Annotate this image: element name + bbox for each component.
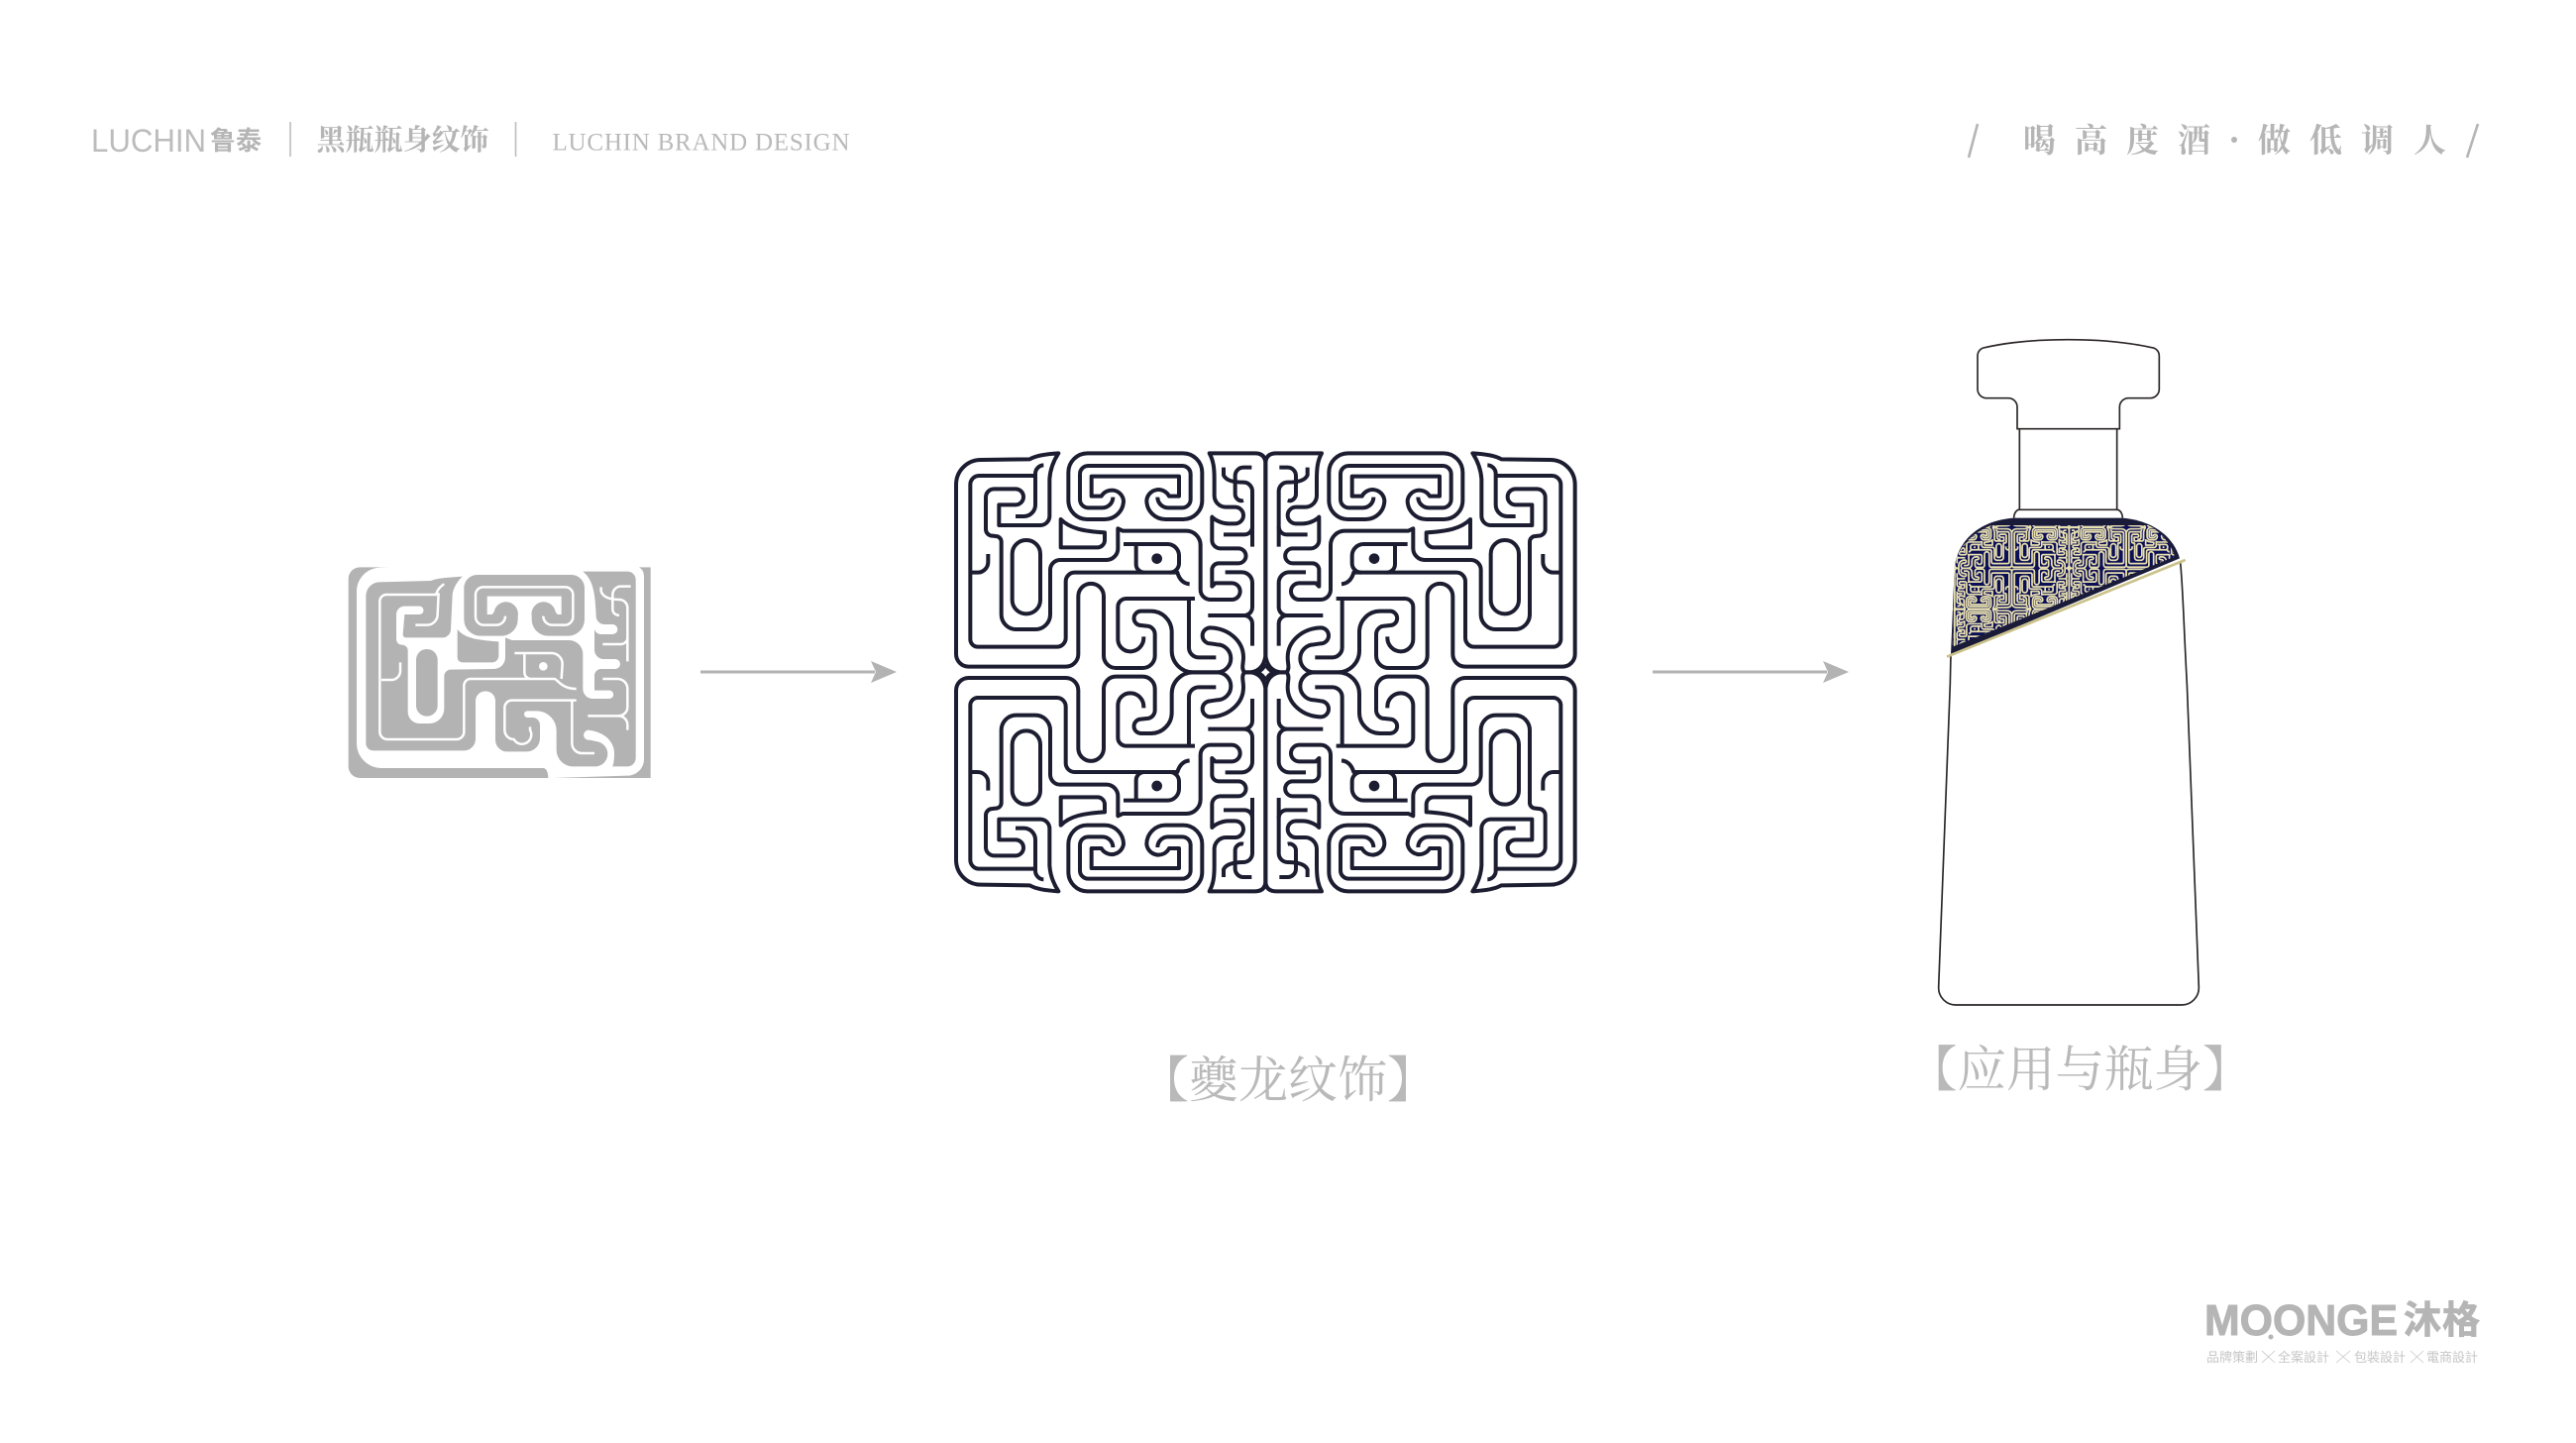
label: kui dragon pattern: 【夔龙纹饰】: [1139, 1053, 1437, 1108]
header: brand and section title: [91, 122, 850, 159]
footer services line: 品牌策劃: [2206, 1350, 2258, 1365]
slogan: top right: [1969, 123, 2478, 160]
label: application on bottle: 【应用与瓶身】: [1908, 1043, 2251, 1097]
kui dragon pattern: [956, 453, 1575, 891]
arrow: pattern to bottle: [1653, 661, 1849, 683]
footer services line: 全案設計: [2278, 1350, 2329, 1365]
footer services line: 包裝設計: [2354, 1350, 2406, 1365]
gray source motif: [349, 567, 651, 778]
bottle with patterned shoulder: [1938, 339, 2200, 1006]
bottle stopper: [1978, 340, 2159, 429]
bottle body outline: [1939, 562, 2199, 1005]
brand logo: LUCHIN 鲁泰: [91, 123, 262, 159]
brand logo: LUCHIN 鲁泰: 鲁泰: [210, 126, 262, 156]
shoulder pattern: [1952, 525, 2175, 646]
bottle neck: [2014, 429, 2122, 518]
footer services line: 電商設計: [2426, 1350, 2478, 1365]
slogan: top right: 喝高度酒: [2023, 123, 2210, 160]
arrow: motif to pattern: [700, 661, 897, 683]
section title: 黑瓶瓶身纹饰: [317, 124, 489, 157]
slogan: top right: 做低调人: [2258, 123, 2446, 160]
footer services line: [2206, 1350, 2478, 1365]
brand logo: LUCHIN 鲁泰: LUCHIN: [91, 123, 206, 159]
shoulder band: [1951, 518, 2180, 655]
footer logo: MOONGE 沐格: 沐格: [2404, 1300, 2480, 1342]
gold trim line: [1947, 560, 2186, 657]
footer logo: MOONGE 沐格: [2204, 1296, 2480, 1365]
footer logo: MOONGE 沐格: MOONGE: [2204, 1296, 2398, 1345]
english subtitle: LUCHIN BRAND DESIGN: [553, 129, 850, 157]
